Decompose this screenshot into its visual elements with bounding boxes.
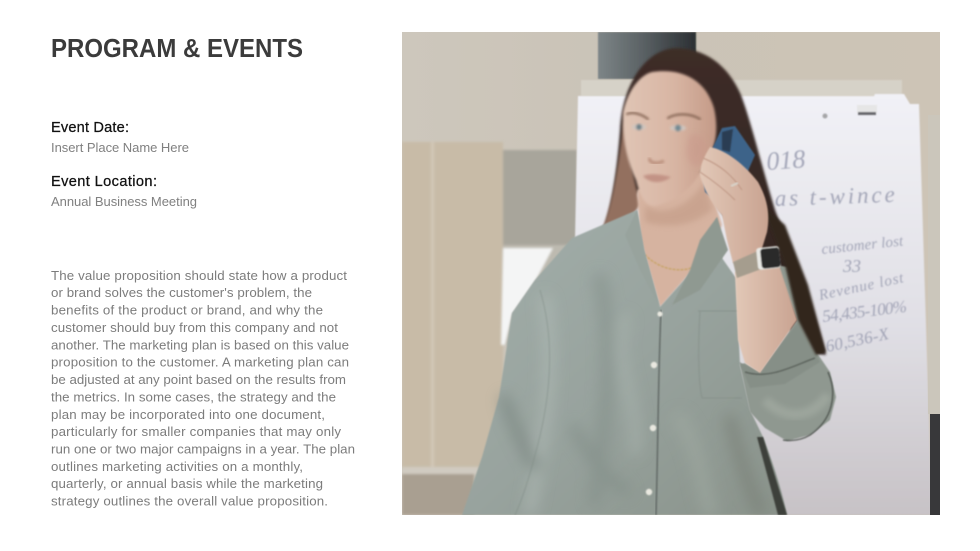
ring — [731, 183, 738, 186]
shirt torso and left sleeve — [462, 210, 787, 515]
lighter left hair strands — [602, 120, 640, 230]
body paragraph: run one or two major campaigns in a year. The plan — [51, 442, 355, 456]
handwriting on flipchart: 33 — [842, 256, 861, 276]
body paragraph: the metrics. In some cases, the strategy and the — [51, 389, 336, 404]
woman — [462, 48, 836, 515]
face — [623, 71, 716, 206]
handwriting on flipchart: 018 — [765, 144, 806, 176]
event details — [51, 120, 197, 209]
hair over shoulder — [775, 214, 828, 356]
hair back — [604, 48, 826, 355]
body paragraph: strategy outlines the overall value proposition. — [51, 494, 328, 509]
right collar — [672, 217, 728, 305]
event date label: Event Date: — [51, 120, 129, 136]
hand — [700, 147, 768, 263]
left collar — [636, 210, 660, 305]
shirt pocket — [699, 310, 702, 312]
shirt buttons — [646, 311, 663, 495]
body paragraph: plan may be incorporated into one document, — [51, 407, 325, 422]
necklace — [646, 254, 691, 271]
flipchart clips — [822, 105, 877, 118]
photo: woman on the phone in front of a flipchart — [402, 32, 940, 515]
handwriting on flipchart: as t-wince — [774, 182, 895, 211]
body paragraph — [51, 268, 355, 509]
body paragraph: another. The marketing plan is based on this value — [51, 337, 349, 352]
brows — [627, 113, 700, 119]
handwriting on flipchart — [765, 144, 908, 356]
window — [501, 248, 553, 345]
rolled cuff — [739, 322, 820, 388]
sleeve edge — [783, 372, 833, 440]
event location label: Event Location: — [51, 174, 157, 190]
event date value: Insert Place Name Here — [51, 140, 189, 155]
body paragraph: particularly for smaller companies that may only — [51, 424, 341, 439]
watch face — [756, 246, 781, 270]
handwriting on flipchart: customer lost — [821, 233, 905, 258]
phone — [703, 125, 756, 196]
pillar — [598, 32, 696, 79]
body paragraph: customer should buy from this company and not — [51, 320, 338, 335]
wall — [402, 32, 940, 515]
neck and chest — [637, 170, 722, 308]
body paragraph: outlines marketing activities on a monthly, — [51, 459, 303, 474]
forearm — [735, 262, 797, 373]
sleeve seam — [526, 292, 550, 486]
handwriting on flipchart: 54,435-100% — [821, 297, 908, 326]
title: PROGRAM & EVENTS — [51, 35, 303, 63]
body paragraph: or brand solves the customer's problem, the — [51, 285, 312, 300]
eyes — [632, 124, 686, 131]
body paragraph: The value proposition should state how a product — [51, 268, 347, 283]
upper sleeve — [740, 265, 836, 441]
cabinet — [402, 142, 577, 515]
body paragraph: proposition to the customer. A marketing plan can — [51, 355, 349, 370]
body paragraph: benefits of the product or brand, and why the — [51, 303, 323, 318]
finger lines — [700, 158, 742, 200]
handwriting on flipchart: Revenue lost — [817, 270, 906, 304]
body paragraph: be adjusted at any point based on the results from — [51, 372, 346, 387]
shirt placket — [656, 310, 661, 515]
shadow by torso — [757, 437, 787, 515]
flipchart paper — [575, 94, 932, 515]
lips — [643, 174, 671, 182]
flipchart top bar — [581, 80, 902, 96]
handwriting on flipchart: 60,536-X — [824, 324, 891, 356]
event location value: Annual Business Meeting — [51, 194, 197, 209]
body paragraph: quarterly, or annual basis while the marketing — [51, 476, 323, 491]
shirt folds — [505, 280, 760, 510]
dark floor corner — [930, 414, 940, 515]
nose — [650, 158, 664, 163]
watch band — [732, 252, 760, 278]
